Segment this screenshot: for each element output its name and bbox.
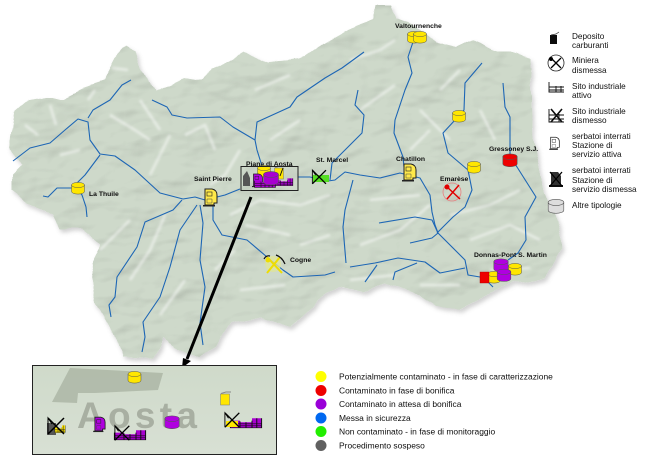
status: blue bbox=[316, 412, 411, 424]
status: blue: Messa in sicurezza bbox=[339, 413, 411, 423]
legend text: altre tipologie: Altre tipologie bbox=[572, 201, 622, 210]
site: Saint Pierre bbox=[194, 176, 232, 206]
site: Gressoney S.J. bbox=[489, 146, 538, 167]
legend text: stazione attiva: servizio attiva bbox=[572, 150, 622, 159]
legend icon: active fuel station bbox=[549, 137, 559, 150]
site: Valtournenche: Valtournenche bbox=[395, 23, 442, 30]
site: Emarèse bbox=[440, 176, 469, 201]
inset disused site yellow and purple bbox=[225, 413, 262, 428]
legend: site types bbox=[548, 32, 637, 213]
site: Gressoney S.J.: Gressoney S.J. bbox=[489, 146, 538, 153]
legend: contamination status bbox=[316, 371, 553, 451]
legend text: sito dismesso: dismesso bbox=[572, 116, 607, 125]
legend text: deposito: carburanti bbox=[572, 41, 609, 50]
site: yellow tank north bbox=[452, 110, 466, 122]
inset road shape bbox=[52, 368, 163, 403]
legend text: stazione dismessa: Stazione di bbox=[572, 176, 613, 185]
inset tank purple bbox=[165, 416, 179, 429]
site: Emarèse: Emarèse bbox=[440, 176, 469, 183]
status: yellow: Potenzialmente contaminato - in fase di caratterizzazione bbox=[339, 372, 553, 382]
site: Donnas-Pont S. Martin: Donnas-Pont S. Martin bbox=[474, 252, 547, 259]
inset Aosta place name: Aosta bbox=[77, 395, 197, 436]
inset disused site with grey depot bbox=[47, 418, 65, 435]
site: Cogne: Cogne bbox=[290, 257, 311, 264]
legend text: stazione attiva: Stazione di bbox=[572, 141, 613, 150]
legend text: miniera: dismessa bbox=[572, 66, 607, 75]
legend text: sito attivo: attivo bbox=[572, 91, 592, 100]
piana callout box bbox=[241, 166, 298, 190]
legend icon: disused industrial site bbox=[549, 109, 564, 122]
status: purple: Contaminato in attesa di bonifica bbox=[339, 399, 462, 409]
legend text: deposito: Deposito bbox=[572, 32, 604, 41]
site: La Thuile bbox=[72, 182, 119, 198]
legend text: stazione dismessa: servizio dismessa bbox=[572, 185, 637, 194]
site: Donnas-Pont S. Martin bbox=[474, 252, 547, 283]
inset fuel depot yellow bbox=[220, 392, 231, 405]
map shadow bbox=[10, 8, 565, 363]
site: Piana di Aosta: Piana di Aosta bbox=[246, 161, 293, 168]
inset disused site purple bbox=[114, 426, 146, 440]
site: Chatillon: Chatillon bbox=[396, 156, 425, 163]
site: Cogne bbox=[264, 255, 311, 273]
site: La Thuile: La Thuile bbox=[89, 191, 119, 198]
status: red: Contaminato in fase di bonifica bbox=[339, 386, 455, 396]
inset pump purple bbox=[93, 417, 105, 432]
inset panel: Aosta plain bbox=[32, 366, 276, 454]
legend text: miniera: Miniera bbox=[572, 56, 599, 65]
legend icon: active industrial site bbox=[549, 82, 564, 92]
inset tank yellow bbox=[128, 371, 141, 383]
site: Valtournenche bbox=[395, 23, 442, 43]
site: Piana di Aosta bbox=[241, 161, 298, 190]
site: yellow tank centre bbox=[468, 161, 480, 173]
legend text: stazione dismessa: serbatoi interrati bbox=[572, 166, 631, 175]
legend icon: fuel depot bbox=[550, 32, 559, 44]
legend icon: other types bbox=[548, 199, 564, 213]
site: St. Marcel bbox=[312, 157, 348, 184]
arrow to inset bbox=[182, 197, 251, 368]
legend text: sito attivo: Sito industriale bbox=[572, 82, 626, 91]
legend text: stazione attiva: serbatoi interrati bbox=[572, 132, 631, 141]
site: St. Marcel: St. Marcel bbox=[316, 157, 348, 164]
status: green: Non contaminato - in fase di monitoraggio bbox=[339, 426, 495, 436]
relief ridges bbox=[25, 40, 540, 315]
legend icon: disused mine bbox=[548, 55, 564, 71]
status: grey: Procedimento sospeso bbox=[339, 440, 425, 450]
map of Valle d'Aosta relief bbox=[8, 5, 563, 360]
legend text: sito dismesso: Sito industriale bbox=[572, 107, 626, 116]
site: Chatillon bbox=[396, 156, 425, 182]
legend icon: disused fuel station bbox=[549, 172, 563, 187]
site: Saint Pierre: Saint Pierre bbox=[194, 176, 232, 183]
river network bbox=[13, 42, 536, 352]
